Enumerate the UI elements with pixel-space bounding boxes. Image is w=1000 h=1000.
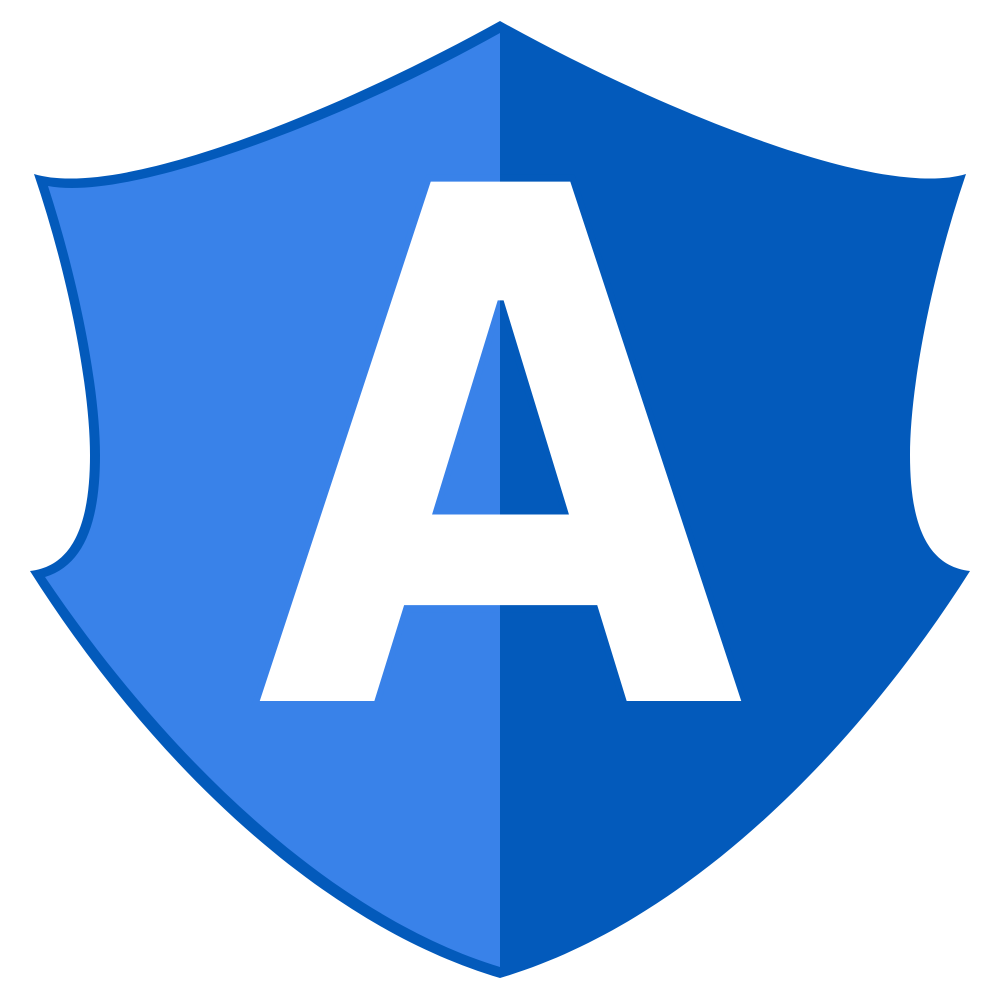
letter A: A: [252, 35, 754, 876]
letter A: [260, 182, 742, 701]
shield: light left half: [45, 33, 500, 967]
letter A: A: [252, 35, 754, 876]
